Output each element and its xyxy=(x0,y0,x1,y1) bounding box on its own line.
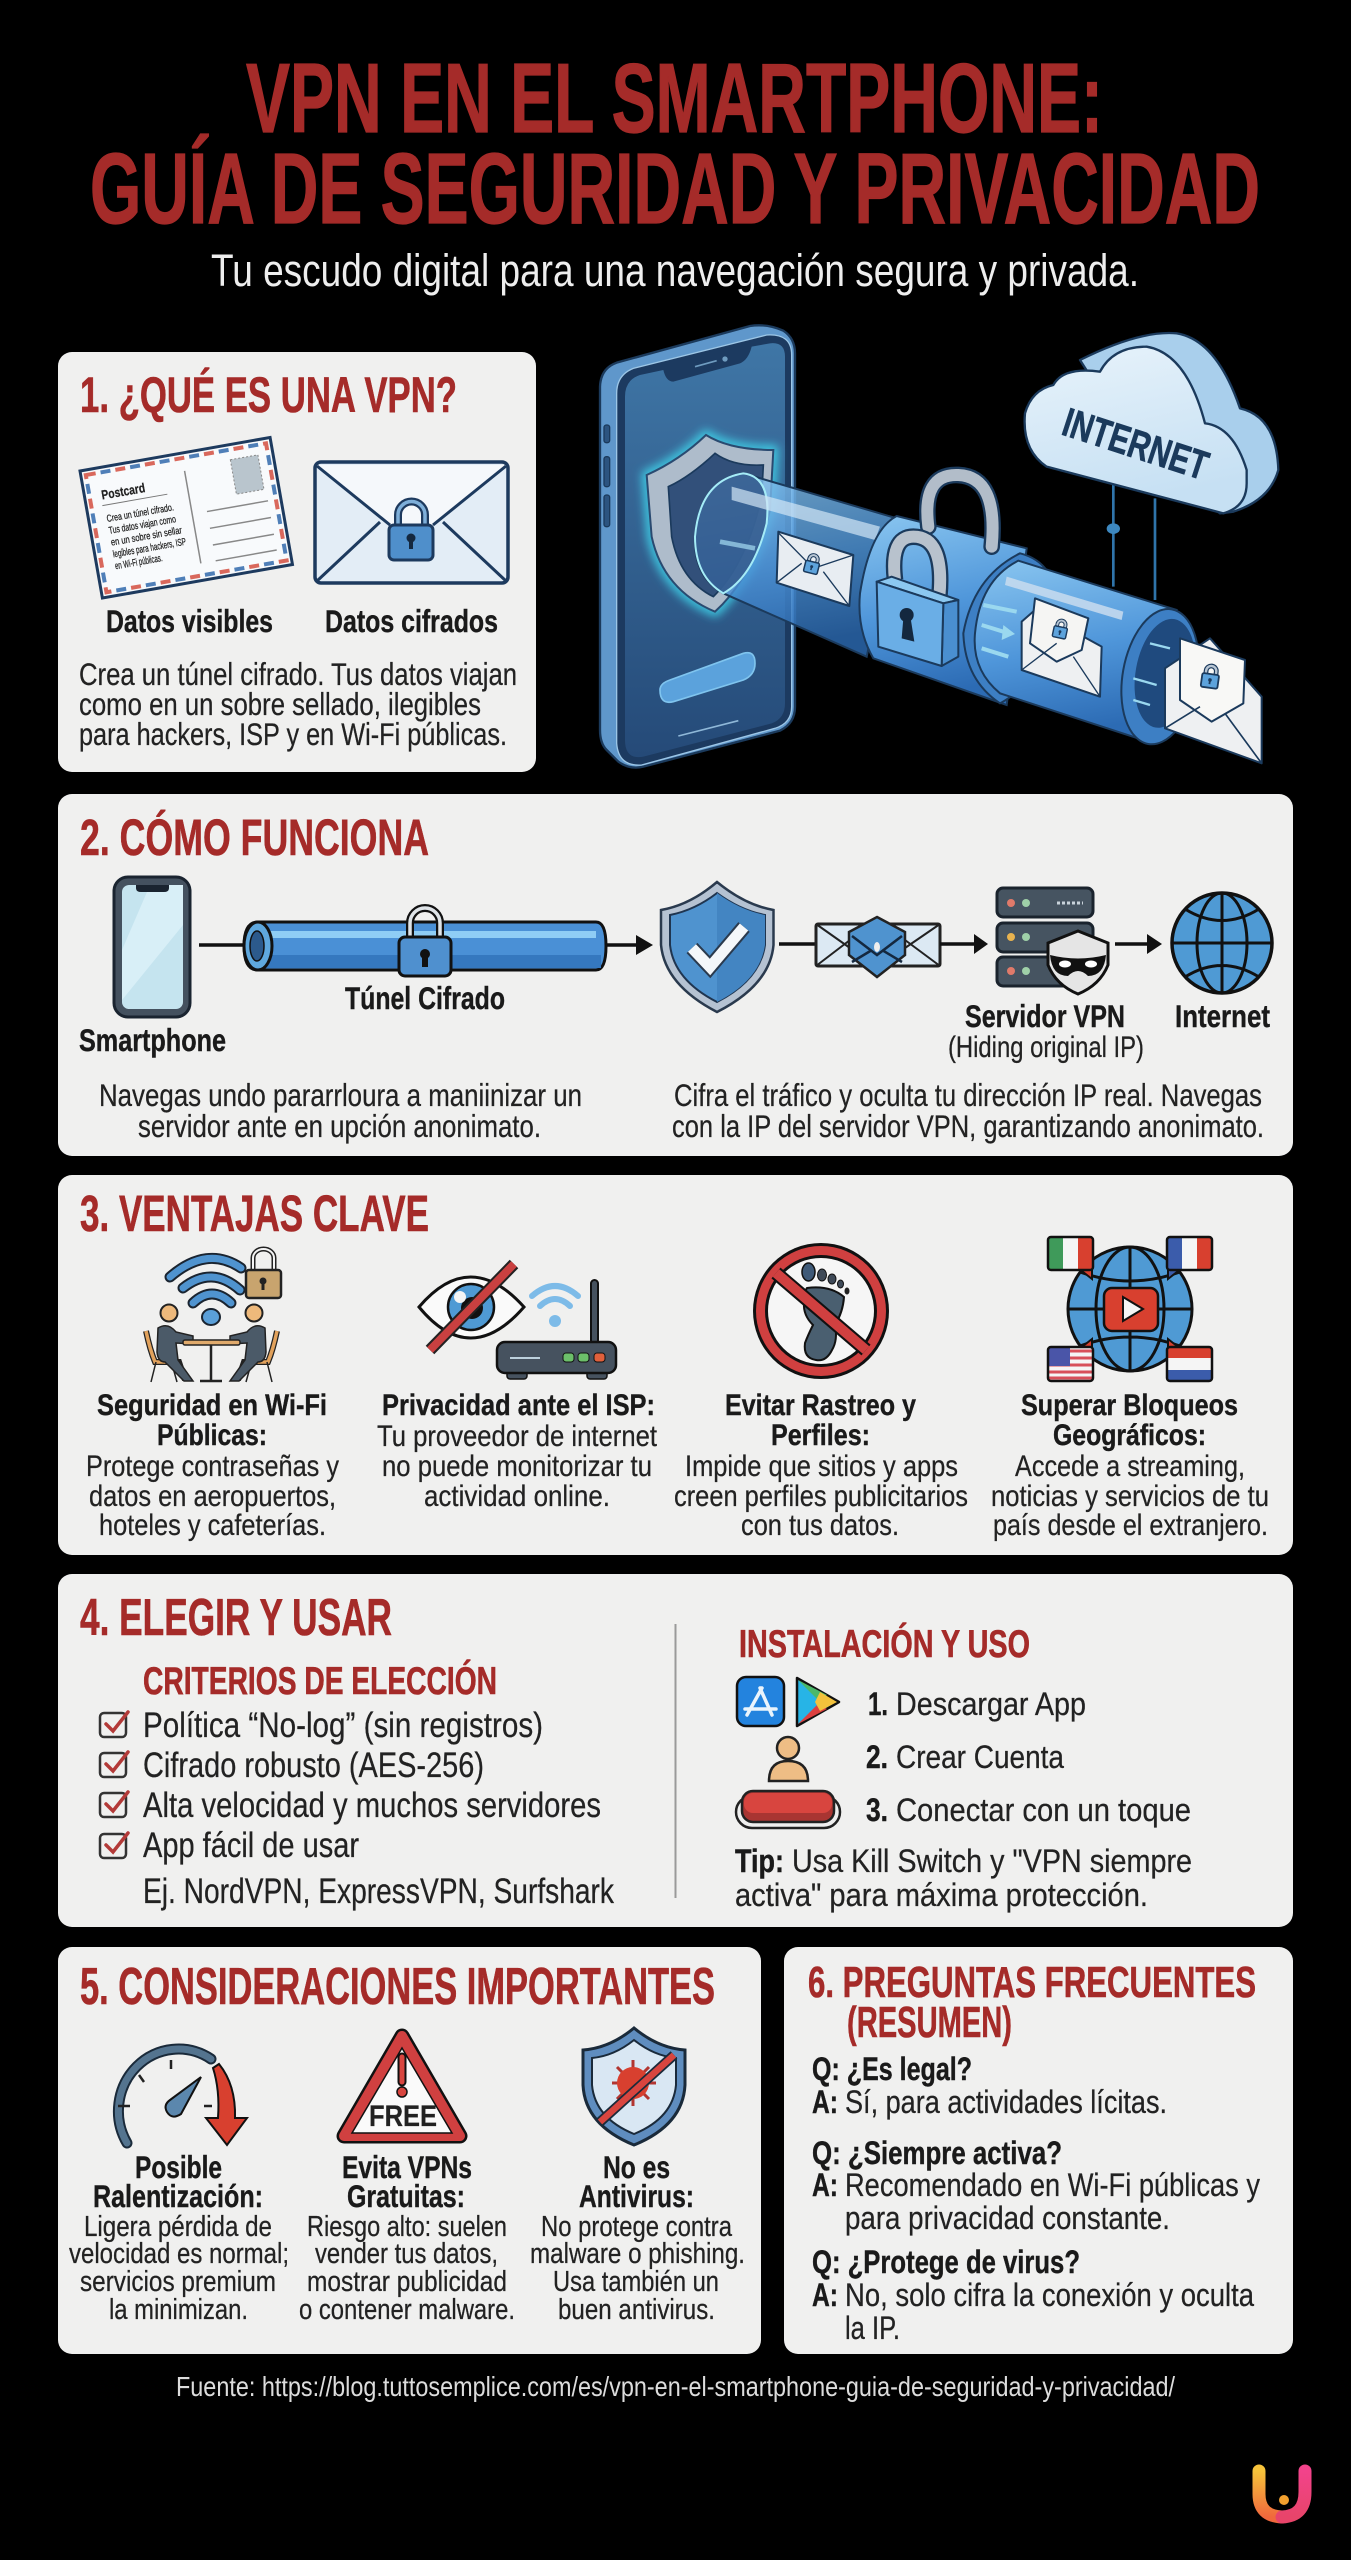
description: para hackers, ISP y en Wi-Fi públicas. xyxy=(79,716,507,752)
source line: Fuente: https://blog.tuttosemplice.com/es/vpn-en-el-smartphone-guia-de-seguridad-y-privacidad/ xyxy=(176,2371,1175,2402)
list: criteria xyxy=(143,1706,614,1911)
icon: encrypted tunnel xyxy=(244,908,606,976)
icon: postcard: Tus datos viajan como xyxy=(108,514,177,537)
text: privacidad isp: actividad online. xyxy=(424,1480,610,1513)
text: no es antivirus: No protege contra xyxy=(541,2211,732,2243)
icon: smartphone xyxy=(114,877,190,1017)
text: right description xyxy=(672,1077,1264,1144)
text: no es antivirus: buen antivirus. xyxy=(558,2294,715,2326)
shield glowing xyxy=(647,435,773,612)
text: evitar rastreo: Evitar Rastreo y xyxy=(725,1389,916,1422)
icon: VPN server with mask xyxy=(997,888,1108,994)
icon: globe with flags xyxy=(1048,1237,1212,1381)
text: left description: Navegas undo pararrloura a maniinizar un xyxy=(99,1077,582,1113)
faq 1 xyxy=(812,2051,1167,2120)
steps: 2. xyxy=(866,1739,888,1775)
steps: Descargar App xyxy=(896,1686,1086,1722)
label: datos cifrados: Datos cifrados xyxy=(325,603,498,639)
text: evitar rastreo: Impide que sitios y apps xyxy=(685,1450,958,1483)
text: evitar rastreo: creen perfiles publicitarios xyxy=(674,1480,968,1513)
icon: no tracking footprint xyxy=(753,1243,889,1379)
icon: user xyxy=(769,1737,808,1781)
tunnel section near exit and envelopes xyxy=(963,333,1278,763)
flag: italy xyxy=(1048,1237,1093,1279)
faq 3: Q: ¿Protege de virus? xyxy=(812,2244,1080,2280)
tunnel collar xyxy=(859,516,1027,705)
icon: globe xyxy=(1172,893,1272,993)
text: evitar rastreo: Perfiles: xyxy=(771,1419,870,1452)
text: evitar rastreo xyxy=(674,1389,968,1542)
icon: connect button xyxy=(736,1791,840,1828)
icon: postcard xyxy=(80,437,292,598)
tip: activa" para máxima protección. xyxy=(735,1877,1148,1913)
cloud label: INTERNET xyxy=(1057,399,1214,489)
faq 1: Sí, para actividades lícitas. xyxy=(845,2084,1167,2120)
text: posible ralentización: Posible xyxy=(135,2149,222,2185)
steps xyxy=(866,1686,1191,1828)
text: evita vpns gratuitas: mostrar publicidad xyxy=(307,2266,507,2298)
faq 2 xyxy=(812,2135,1260,2236)
subheading: instalación: INSTALACIÓN Y USO xyxy=(739,1622,1030,1666)
icon: app store xyxy=(737,1677,784,1726)
padlock on tunnel xyxy=(877,475,993,666)
icon: envelope with shield xyxy=(816,917,940,977)
text: evita vpns gratuitas xyxy=(299,2149,515,2326)
panel: 2 cómo funciona xyxy=(58,794,1293,1156)
arrow: tunnel to shield xyxy=(606,935,653,955)
icon: eye and router xyxy=(419,1264,616,1379)
label: internet: Internet xyxy=(1175,998,1270,1034)
arrow: server to internet xyxy=(1115,934,1162,954)
text: no es antivirus: No es xyxy=(603,2149,670,2185)
faq 3 xyxy=(812,2244,1254,2346)
hero illustration: phone, tunnel and cloud xyxy=(600,325,1278,768)
description: como en un sobre sellado, ilegibles xyxy=(79,686,481,722)
text: seguridad wifi: Seguridad en Wi-Fi xyxy=(97,1389,327,1422)
faq 3: la IP. xyxy=(845,2310,900,2346)
text: no es antivirus: Antivirus: xyxy=(579,2178,694,2214)
title xyxy=(90,43,1260,245)
text: seguridad wifi: Públicas: xyxy=(157,1419,267,1452)
label: smartphone: Smartphone xyxy=(79,1022,226,1058)
panel: 4 elegir y usar xyxy=(58,1574,1293,1927)
tip: Tip: xyxy=(735,1843,784,1879)
phone xyxy=(600,325,795,768)
heading 4: 4. ELEGIR Y USAR xyxy=(80,1589,392,1647)
label: datos visibles: Datos visibles xyxy=(106,603,273,639)
list: criteria: Alta velocidad y muchos servidores xyxy=(143,1786,601,1825)
flag: usa xyxy=(1048,1339,1093,1381)
icon: antivirus shield xyxy=(583,2028,685,2145)
text: seguridad wifi: hoteles y cafeterías. xyxy=(99,1509,326,1542)
tip: Usa Kill Switch y "VPN siempre xyxy=(792,1843,1192,1879)
text: bloqueos geográficos: Superar Bloqueos xyxy=(1021,1389,1238,1422)
faq 1: Q: ¿Es legal? xyxy=(812,2051,972,2087)
panel: 6 preguntas frecuentes xyxy=(784,1947,1293,2354)
heading 3: 3. VENTAJAS CLAVE xyxy=(80,1185,429,1242)
label: servidor VPN: Servidor VPN xyxy=(965,998,1125,1034)
text: evitar rastreo: con tus datos. xyxy=(741,1509,899,1542)
icon: postcard: Postcard xyxy=(100,480,146,503)
faq 2: A: xyxy=(812,2167,838,2203)
heading 1: 1. ¿QUÉ ES UNA VPN? xyxy=(80,367,457,423)
faq 2: Recomendado en Wi-Fi públicas y xyxy=(845,2167,1260,2203)
icon: google play xyxy=(797,1678,839,1726)
text: bloqueos geográficos xyxy=(991,1389,1269,1542)
icons: checkboxes xyxy=(100,1712,128,1858)
flag: france xyxy=(1167,1237,1212,1279)
text: privacidad isp: no puede monitorizar tu xyxy=(382,1450,652,1483)
steps: Crear Cuenta xyxy=(896,1739,1064,1775)
list: criteria: Ej. NordVPN, ExpressVPN, Surfshark xyxy=(143,1872,614,1911)
faq 3: A: xyxy=(812,2277,838,2313)
text: posible ralentización: Ligera pérdida de xyxy=(84,2211,272,2243)
steps: 3. xyxy=(866,1792,888,1828)
text: no es antivirus xyxy=(530,2149,745,2326)
text: evita vpns gratuitas: Evita VPNs xyxy=(342,2149,472,2185)
text: seguridad wifi: datos en aeropuertos, xyxy=(89,1480,336,1513)
envelope inside tunnel xyxy=(777,532,853,606)
faq 1: A: xyxy=(812,2084,838,2120)
envelope leaving tunnel xyxy=(1165,638,1262,763)
faq 2: para privacidad constante. xyxy=(845,2200,1170,2236)
list: criteria: Cifrado robusto (AES-256) xyxy=(143,1746,484,1785)
text: posible ralentización: Ralentización: xyxy=(93,2178,263,2214)
steps: 1. xyxy=(868,1686,888,1722)
heading 5: 5. CONSIDERACIONES IMPORTANTES xyxy=(80,1958,715,2016)
text: no es antivirus: Usa también un xyxy=(553,2266,719,2298)
text: left description: servidor ante en upción anonimato. xyxy=(138,1108,541,1144)
logo xyxy=(1259,2471,1305,2517)
icon: public wifi xyxy=(146,1249,281,1382)
label: hiding original ip: (Hiding original IP) xyxy=(948,1031,1144,1064)
icon: free warning triangle xyxy=(344,2036,460,2136)
text: posible ralentización: servicios premium xyxy=(80,2266,276,2298)
steps: Conectar con un toque xyxy=(896,1792,1191,1828)
heading 2: 2. CÓMO FUNCIONA xyxy=(80,809,429,866)
description: Crea un túnel cifrado. Tus datos viajan xyxy=(79,656,517,692)
tip xyxy=(735,1843,1192,1913)
text: posible ralentización xyxy=(69,2149,289,2326)
text: evita vpns gratuitas: o contener malware. xyxy=(299,2294,515,2326)
text: bloqueos geográficos: Geográficos: xyxy=(1053,1419,1206,1452)
flag: netherlands xyxy=(1167,1339,1212,1381)
subtitle: Tu escudo digital para una navegación segura y privada. xyxy=(211,245,1139,296)
text: evita vpns gratuitas: Gratuitas: xyxy=(347,2178,465,2214)
panel: 5 consideraciones importantes xyxy=(58,1947,761,2354)
connector lines to cloud xyxy=(1107,485,1155,600)
icon: postcard: en Wi-Fi públicas. xyxy=(114,553,163,572)
icon: postcard: en un sobre sin sellar xyxy=(110,525,183,549)
text: no es antivirus: malware o phishing. xyxy=(530,2238,745,2270)
cloud xyxy=(1025,333,1278,513)
label: free: FREE xyxy=(369,2100,437,2133)
faq 2: Q: ¿Siempre activa? xyxy=(812,2135,1062,2171)
text: posible ralentización: la minimizan. xyxy=(109,2294,248,2326)
arrow: shield to envelope xyxy=(779,942,816,946)
envelope in tunnel xyxy=(1022,598,1102,697)
text: privacidad isp xyxy=(377,1389,658,1513)
icon: shield check xyxy=(661,882,774,1012)
subheading: criterios: CRITERIOS DE ELECCIÓN xyxy=(143,1659,497,1703)
text: bloqueos geográficos: país desde el extranjero. xyxy=(993,1509,1268,1542)
icon: postcard: Crea un túnel cifrado. xyxy=(106,502,175,525)
description xyxy=(79,656,517,752)
text: evita vpns gratuitas: vender tus datos, xyxy=(315,2238,498,2270)
text: bloqueos geográficos: noticias y servicios de tu xyxy=(991,1480,1269,1513)
label: túnel cifrado: Túnel Cifrado xyxy=(345,980,505,1016)
text: left description xyxy=(99,1077,582,1144)
faq 3: No, solo cifra la conexión y oculta xyxy=(845,2277,1254,2313)
text: privacidad isp: Privacidad ante el ISP: xyxy=(382,1389,655,1422)
icon: sealed envelope xyxy=(315,462,508,583)
text: privacidad isp: Tu proveedor de internet xyxy=(377,1420,658,1453)
text: seguridad wifi xyxy=(86,1389,339,1542)
tunnel section near phone xyxy=(695,473,897,657)
arrow: phone to tunnel xyxy=(199,943,244,947)
panel: 3 ventajas clave xyxy=(58,1175,1293,1555)
arrow: envelope to server xyxy=(940,934,988,954)
text: evita vpns gratuitas: Riesgo alto: suelen xyxy=(307,2211,507,2243)
icon: postcard: legibles para hackers, ISP xyxy=(112,537,187,560)
text: seguridad wifi: Protege contraseñas y xyxy=(86,1450,339,1483)
heading 6: (RESUMEN) xyxy=(847,1998,1012,2047)
text: bloqueos geográficos: Accede a streaming, xyxy=(1015,1450,1245,1483)
heading 6 xyxy=(808,1958,1256,2047)
icon: speedometer xyxy=(118,2049,247,2145)
text: posible ralentización: velocidad es normal; xyxy=(69,2238,289,2270)
panel: 1 qué es una VPN xyxy=(58,352,536,772)
list: criteria: App fácil de usar xyxy=(143,1826,359,1865)
list: criteria: Política “No-log” (sin registros) xyxy=(143,1706,543,1745)
